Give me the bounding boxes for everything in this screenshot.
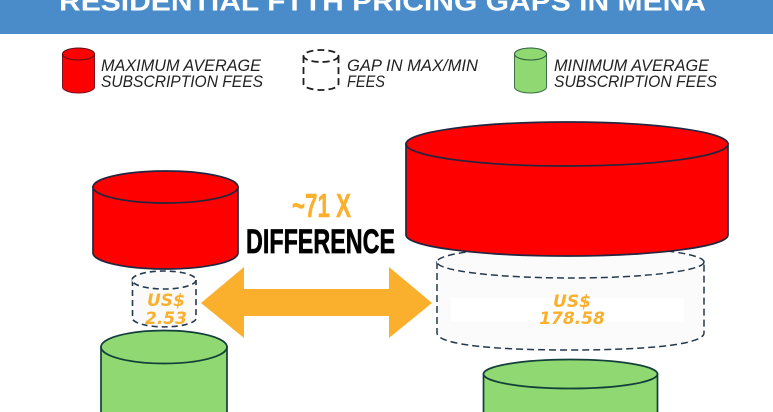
right stack: gap cylinder <box>437 246 704 350</box>
left stack: gap cylinder <box>132 271 196 329</box>
title banner <box>0 0 773 34</box>
left stack: minimum green cylinder <box>101 330 227 412</box>
left gap value: 2.53 <box>145 309 187 329</box>
legend item: maximum average subscription fees: SUBSCRIPTION FEES <box>101 72 264 91</box>
right gap value: 178.58 <box>539 309 605 329</box>
right stack: maximum red cylinder <box>406 122 728 256</box>
legend item: maximum average subscription fees <box>62 48 264 93</box>
legend <box>62 48 718 93</box>
double-headed arrow <box>201 267 432 338</box>
legend item: gap in max/min fees: GAP IN MAX/MIN <box>347 56 479 75</box>
legend item: maximum average subscription fees: MAXIMUM AVERAGE <box>101 56 262 75</box>
legend item: gap in max/min fees: FEES <box>347 72 386 91</box>
legend item: minimum average subscription fees <box>514 48 718 93</box>
legend item: gap in max/min fees <box>304 50 479 91</box>
left stack: maximum red cylinder <box>93 171 238 269</box>
left gap value: US$ <box>147 291 185 311</box>
left gap value <box>145 291 187 329</box>
right stack: minimum green cylinder <box>484 360 658 412</box>
legend item: minimum average subscription fees: MINIMUM AVERAGE <box>554 56 710 75</box>
legend item: minimum average subscription fees: SUBSCRIPTION FEES <box>554 72 718 91</box>
multiplier label: ~71 X <box>292 187 351 224</box>
right gap value <box>539 292 605 329</box>
right gap value: US$ <box>553 292 591 312</box>
difference label: DIFFERENCE <box>246 223 395 261</box>
